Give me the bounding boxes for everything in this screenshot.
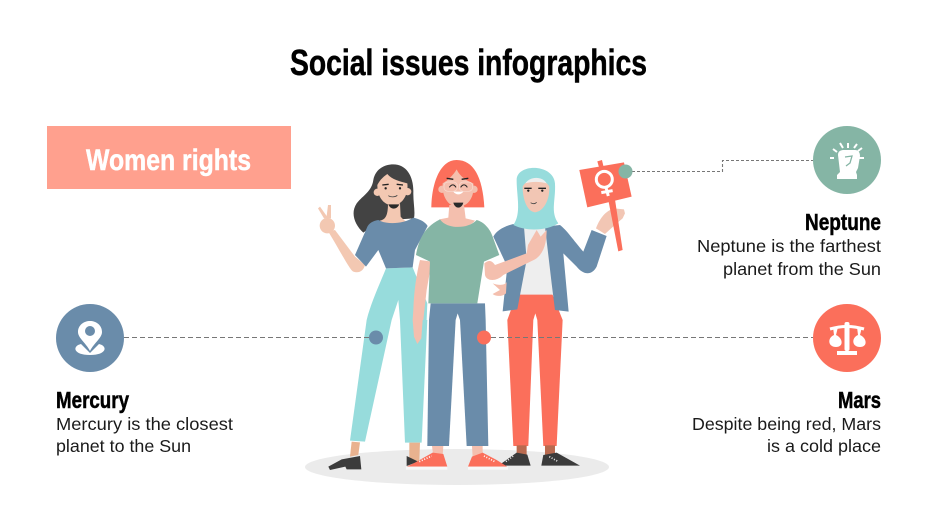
icon: raised fist: [813, 126, 881, 194]
connector: Neptune: [618, 160, 813, 178]
title: Social issues infographics: [290, 42, 647, 83]
woman in hijab, upper body: [493, 168, 625, 320]
banner: Women rights: Women rights: [86, 144, 251, 177]
icon: scales of justice: [813, 304, 881, 372]
banner: Women rights: [47, 126, 291, 189]
text block: Mars: [692, 387, 881, 456]
woman with peace sign, legs: [328, 320, 427, 470]
connector: Mars: [477, 330, 813, 344]
illustration: three women: [318, 160, 625, 470]
text block: Mercury: [56, 387, 233, 456]
text block: Mercury: Mercury: [56, 387, 129, 413]
protest sign with female symbol: [579, 160, 632, 251]
woman with peace sign, upper body: [318, 164, 428, 320]
text block: Neptune: Neptune is the farthest: [697, 236, 881, 256]
woman in green, legs: [406, 320, 508, 470]
text block: Mars: Mars: [838, 387, 881, 413]
text block: Mercury: Mercury is the closest: [56, 414, 233, 434]
text block: Neptune: Neptune: [805, 209, 881, 235]
woman in green, upper body: [413, 160, 547, 320]
text block: Neptune: planet from the Sun: [723, 259, 881, 279]
text block: Mercury: planet to the Sun: [56, 436, 191, 456]
text block: Mars: Despite being red, Mars: [692, 414, 881, 434]
illustration: ground shadow: [305, 449, 609, 485]
icon: map pin: [56, 304, 124, 372]
text block: Neptune: [697, 209, 881, 279]
woman in hijab, legs: [501, 320, 580, 466]
connector: Mercury: [124, 330, 383, 344]
text block: Mars: is a cold place: [767, 436, 881, 456]
